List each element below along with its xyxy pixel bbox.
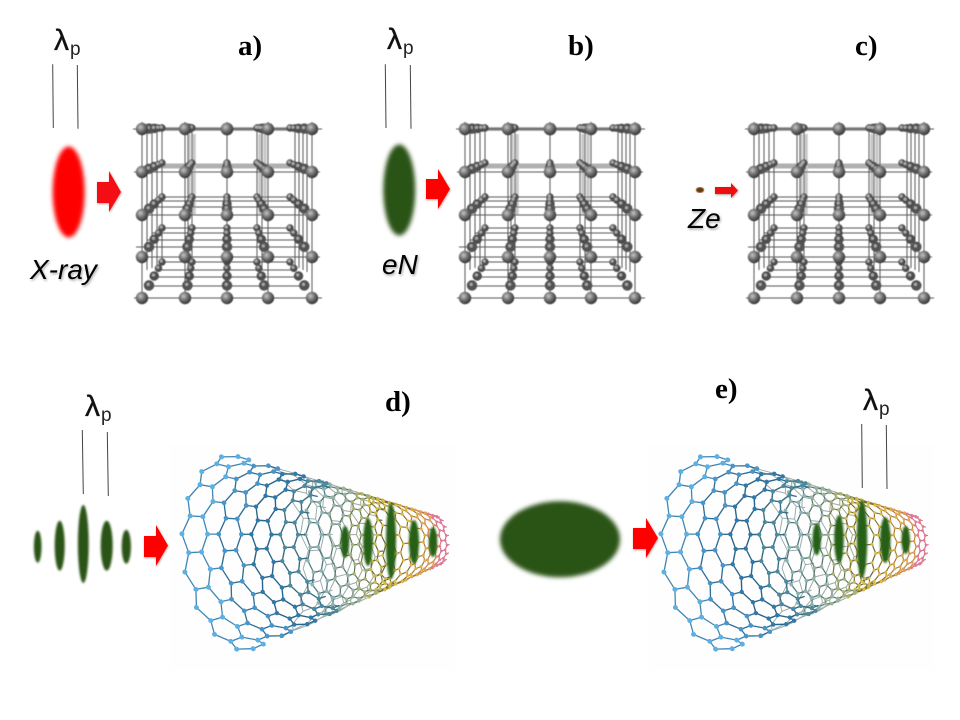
panel b: electron bunch on crystal lattice: [382, 23, 645, 304]
crystal lattice a: [133, 122, 322, 304]
green electron bunch: [383, 144, 415, 236]
eN label: eN: [382, 249, 419, 280]
wavelength label d: p: [101, 405, 112, 426]
wavelength label d: λ: [85, 390, 100, 423]
wavelength label a: λ: [54, 24, 69, 57]
carbon nanotube d: [170, 445, 458, 670]
crystal lattice c: [745, 122, 934, 304]
carbon nanotube e: [649, 445, 937, 670]
wavelength label b: p: [403, 38, 414, 59]
panel e: long bunch self-modulating in nanotube: [500, 373, 937, 670]
panel tag a: a): [238, 30, 262, 62]
panel tag b: b): [568, 30, 594, 62]
wavelength markers a: [53, 64, 78, 129]
arrow d: [144, 525, 168, 566]
long green bunch: [500, 501, 620, 577]
wavelength label a: p: [70, 39, 81, 60]
X-ray label: X-ray: [29, 254, 99, 285]
wavelength label e: p: [879, 399, 890, 420]
panel d: modulated beam entering nanotube: [34, 386, 458, 670]
microbunch train: [34, 505, 131, 583]
panel tag d: d): [385, 386, 411, 418]
microbunches inside nanotube e: [812, 500, 910, 578]
crystal lattice b: [456, 122, 645, 304]
wavelength label b: [387, 23, 414, 59]
wavelength label a: [54, 24, 81, 60]
microbunches inside nanotube d: [341, 503, 437, 579]
panel tag e: e): [715, 373, 738, 405]
wavelength markers e: [862, 424, 887, 489]
panel tag c: c): [855, 30, 878, 62]
Ze label: Ze: [687, 203, 721, 234]
ion dot: [696, 187, 704, 193]
wavelength label e: λ: [863, 384, 878, 417]
wavelength markers b: [385, 64, 411, 129]
arrow e: [633, 518, 658, 558]
wavelength label e: [863, 384, 890, 420]
arrow c: [715, 183, 738, 198]
wavelength markers d: [82, 430, 108, 496]
panel c: single ion on crystal lattice: [687, 30, 934, 304]
red X-ray pulse: [53, 146, 85, 238]
arrow a: [97, 171, 121, 212]
arrow b: [426, 169, 450, 209]
panel a: X-ray pulse on crystal lattice: [29, 24, 322, 304]
wavelength label b: λ: [387, 23, 402, 56]
wavelength label d: [85, 390, 112, 426]
